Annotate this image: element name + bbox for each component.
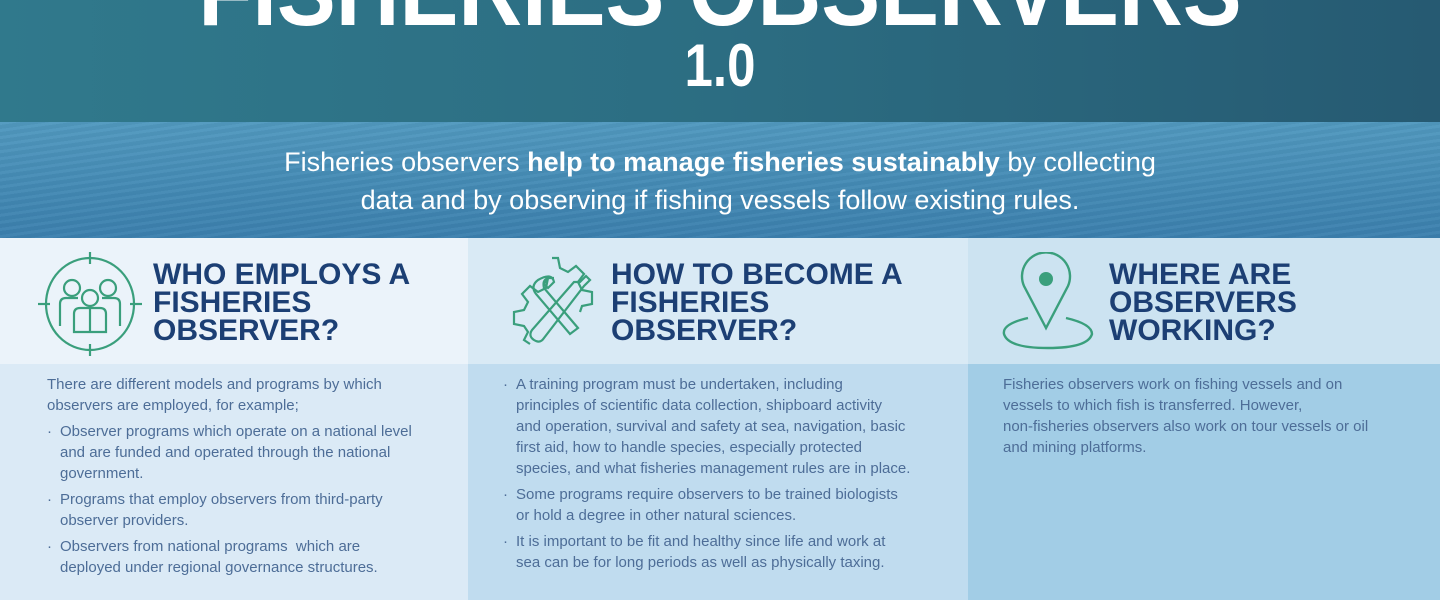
heading: FISHERIES <box>153 286 311 319</box>
text block: It is important to be fit and healthy since life and work at <box>516 533 885 550</box>
panel: who employs <box>0 238 468 600</box>
text block: observers are employed, for example; <box>47 397 299 414</box>
text block: and are funded and operated through the national <box>60 444 390 461</box>
version number: 1.0 <box>685 32 755 99</box>
text block: Observers from national programs which are <box>60 538 360 555</box>
text block <box>1003 376 1368 456</box>
heading <box>611 258 903 347</box>
text block: A training program must be undertaken, including <box>516 376 843 393</box>
text block: Programs that employ observers from third-party <box>60 491 383 508</box>
icon: map pin <box>1002 252 1094 350</box>
ocean strip with subtitle <box>0 122 1440 238</box>
subtitle <box>284 147 1156 215</box>
panel: where working <box>968 238 1440 600</box>
text block: principles of scientific data collection, shipboard activity <box>516 397 882 414</box>
heading <box>153 258 410 347</box>
panel: how to become <box>468 238 968 600</box>
text block: government. <box>60 465 143 482</box>
text block: non-fisheries observers also work on tour vessels or oil <box>1003 418 1368 435</box>
text block: species, and what fisheries management rules are in place. <box>516 460 910 477</box>
text block: deployed under regional governance structures. <box>60 559 378 576</box>
text block: sea can be for long periods as well as physically taxing. <box>516 554 885 571</box>
text block: Observer programs which operate on a national level <box>60 423 412 440</box>
text block: and operation, survival and safety at sea, navigation, basic <box>516 418 905 435</box>
text block <box>47 376 412 576</box>
subtitle: Fisheries observers help to manage fisheries sustainably by collecting <box>284 147 1156 177</box>
icon: gear with tools <box>512 256 594 345</box>
heading: WHO EMPLOYS A <box>153 258 410 291</box>
title banner <box>0 0 1440 122</box>
text block: Some programs require observers to be trained biologists <box>516 486 898 503</box>
heading: FISHERIES <box>611 286 769 319</box>
heading: OBSERVER? <box>611 314 797 347</box>
heading: OBSERVERS <box>1109 286 1297 319</box>
heading: OBSERVER? <box>153 314 339 347</box>
text block: and mining platforms. <box>1003 439 1146 456</box>
heading: HOW TO BECOME A <box>611 258 903 291</box>
heading: WORKING? <box>1109 314 1276 347</box>
text block: Fisheries observers work on fishing vessels and on <box>1003 376 1342 393</box>
heading: WHERE ARE <box>1109 258 1291 291</box>
text block: observer providers. <box>60 512 188 529</box>
subtitle: data and by observing if fishing vessels follow existing rules. <box>361 185 1079 215</box>
heading <box>1109 258 1297 347</box>
text block: or hold a degree in other natural sciences. <box>516 507 796 524</box>
text block: There are different models and programs by which <box>47 376 382 393</box>
text block <box>504 376 910 571</box>
icon: people in target <box>38 252 142 356</box>
text block: vessels to which fish is transferred. However, <box>1003 397 1302 414</box>
text block: first aid, how to handle species, especially protected <box>516 439 862 456</box>
